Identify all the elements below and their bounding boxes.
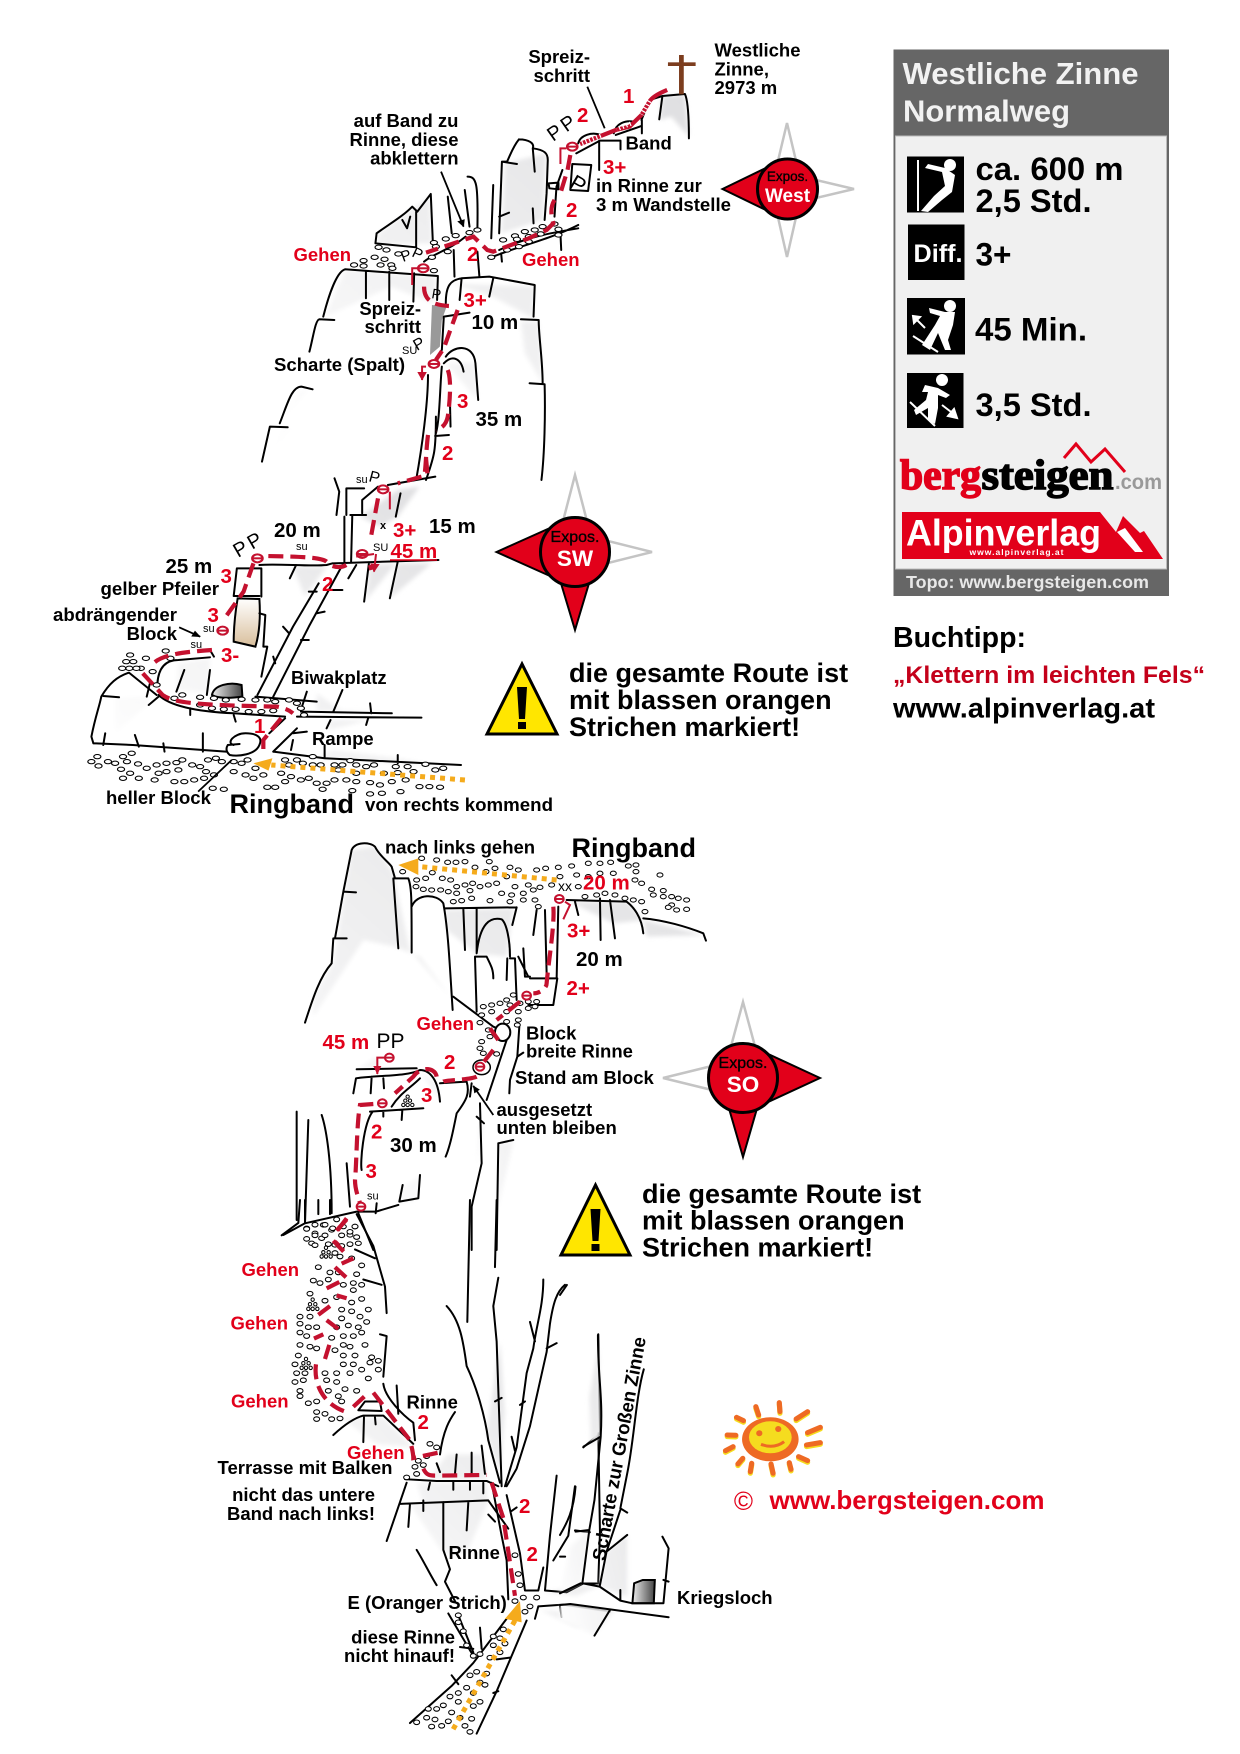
stat: ascent time: 45 Min. (975, 312, 1087, 348)
label: xx: xx (558, 878, 572, 894)
bolt marks middle: SU (373, 542, 388, 554)
terrace lines (283, 1068, 513, 1250)
label: auf Band zu Rinne (350, 110, 458, 168)
heading: Ringband upper: Ringband (230, 789, 354, 819)
icon: climber (907, 156, 964, 212)
grades top: 2 (442, 442, 453, 465)
book url: www.alpinverlag.at (892, 692, 1155, 724)
footer: Topo credit: Topo: www.bergsteigen.com (906, 572, 1149, 592)
label: Gehen gully: Gehen (416, 1013, 474, 1034)
grades lower: 2 (418, 1411, 429, 1434)
stat: length and time: 2,5 Std. (976, 183, 1092, 219)
rock shading (343, 1341, 610, 1628)
topo: upper section summit to terrace (262, 55, 696, 480)
panel: route info (894, 50, 1169, 596)
rock lines upper (234, 477, 438, 602)
logo: Alpinverlag: Alpinverlag (906, 512, 1101, 554)
bolt marks top: SU (402, 345, 417, 357)
logo: bergsteigen.com: .com (1115, 471, 1162, 494)
bolt marks top (399, 109, 591, 357)
label: E (Oranger Strich): E (Oranger Strich) (348, 1592, 507, 1613)
route dashes (143, 477, 421, 755)
icon: warning triangle (561, 1185, 630, 1255)
cairn (403, 1097, 412, 1105)
summit rock lines (499, 94, 689, 233)
pebbles: bowl top (307, 1225, 358, 1245)
route dashes (424, 155, 570, 478)
approach arrowhead (398, 858, 418, 875)
compass: Expos. SW: Expos. (551, 529, 599, 546)
label: Rampe: Rampe (312, 728, 374, 749)
route hatching (581, 101, 649, 144)
grades top: 3 (457, 390, 468, 413)
label: in Rinne zur 3 m Wandstelle: 3 m Wandstelle (596, 194, 731, 215)
topo: middle section down to Ringband (91, 452, 465, 794)
long chimney lines (257, 565, 342, 697)
pointer arrows (179, 627, 232, 792)
grades lower: 3+ (567, 920, 590, 942)
panel body (896, 136, 1166, 569)
labels: Gehen scree (230, 1259, 299, 1412)
grades top (442, 85, 634, 465)
left block and ledge lines (375, 177, 578, 277)
left tower lines (305, 843, 547, 1023)
book tip (892, 622, 1205, 724)
grades top: 2 (566, 199, 577, 222)
label: 45 m PP: PP (376, 1030, 405, 1053)
bolt marks middle: su (203, 623, 215, 635)
grades middle (208, 519, 416, 738)
compass: Expos. West: West (765, 186, 811, 207)
bowl lines (282, 1200, 455, 1472)
label: Scharte zur Großen Zinne: Scharte zur Großen Zinne (589, 1335, 651, 1562)
compass: Expos. SO: SO (727, 1072, 759, 1097)
label: Westliche Zinne summit (714, 40, 801, 98)
pebbles: terrace (407, 1444, 537, 1612)
label: Block breite Rinne: breite Rinne (526, 1040, 633, 1062)
panel title: Westliche Zinne (902, 57, 1138, 91)
rock lines (560, 1285, 669, 1636)
heading: Buchtipp: Buchtipp: (893, 622, 1026, 654)
pebbles: gully (480, 995, 537, 1054)
compass: Expos. SO: Expos. (719, 1055, 767, 1072)
icon: difficulty (908, 224, 964, 280)
label: nicht das untere Band nach links (227, 1484, 375, 1524)
label: 35 m: 35 m (476, 408, 522, 431)
rock shading (115, 487, 435, 765)
label: 45 m PP (322, 1030, 405, 1054)
pebbles: scree bowl (295, 1219, 378, 1419)
route upper end (425, 452, 427, 473)
bolt marks top: P (566, 170, 591, 199)
bolt marks middle: PP (230, 527, 269, 562)
label: in Rinne zur 3 m Wandstelle (596, 175, 731, 215)
logo: bergsteigen.com: steigen (982, 453, 1114, 499)
belay stations (361, 899, 559, 1207)
panel frame (894, 50, 1169, 596)
grades top: 3+ (603, 156, 626, 179)
labels: Gehen scree: Gehen (230, 1312, 288, 1334)
label: Block breite Rinne (526, 1022, 633, 1062)
cairn (122, 655, 136, 668)
label: Biwakplatz: Biwakplatz (291, 667, 387, 688)
label: Stand am Block: Stand am Block (515, 1067, 654, 1088)
label: Gehen right: Gehen (522, 249, 580, 270)
compass: Expos. SO (663, 1002, 820, 1157)
pebbles: ledge (141, 651, 304, 715)
grades lower (366, 920, 590, 1566)
label: Spreizschritt top: Spreiz- (528, 46, 590, 67)
label: 25 m: 25 m (166, 555, 212, 578)
stat: length and time (976, 151, 1124, 219)
label: Rinne lower: Rinne (448, 1542, 500, 1563)
icon: warning triangle (487, 664, 557, 734)
grades middle: 3 (220, 565, 232, 588)
topo: lower section bottom (282, 1200, 610, 1734)
rappel arrows (377, 902, 570, 1074)
block (495, 1024, 510, 1041)
label: Spreizschritt middle (359, 298, 421, 337)
box and right wall lines (453, 898, 706, 1100)
approach dotted line (452, 1621, 515, 1732)
label: nicht das untere Band nach links: nicht das untere (232, 1484, 375, 1505)
label: diese Rinne nicht hinauf: diese Rinne (351, 1626, 455, 1648)
label: ausgesetzt unten bleiben: ausgesetzt (496, 1099, 592, 1120)
chimney shadow (430, 305, 447, 355)
bolt marks middle: su (296, 541, 308, 553)
rock shading (280, 847, 703, 1223)
grades top: 2 (577, 104, 588, 127)
labels: Gehen scree: Gehen (231, 1390, 289, 1412)
bolt marks middle: su (356, 474, 368, 486)
label: Gehen left: Gehen (294, 244, 351, 265)
right wall lines (535, 1334, 610, 1619)
grades top: 1 (623, 85, 634, 108)
stand block (473, 1060, 490, 1075)
label: Band: Band (626, 132, 672, 154)
label: von rechts kommend: von rechts kommend (365, 794, 553, 815)
warning text: mit blassen orangen (569, 685, 832, 715)
bolt marks top: P (430, 285, 442, 303)
label: Westliche Zinne summit: Zinne, (714, 58, 769, 80)
label: Block breite Rinne: Block (526, 1022, 577, 1044)
copyright line: © (734, 1486, 753, 1516)
logo: bergsteigen.com (900, 444, 1162, 499)
pebbles: lower gully (417, 1615, 505, 1732)
grades middle: 1 (254, 715, 265, 738)
label: ausgesetzt unten bleiben (496, 1099, 617, 1138)
grades lower: 2 (526, 1543, 538, 1566)
logo: Alpinverlag: www.alpinverlag.at (968, 547, 1064, 557)
labels: Gehen scree: Gehen (242, 1259, 299, 1280)
route dashes (335, 907, 554, 1250)
label: Spreizschritt middle: Spreiz- (359, 298, 421, 319)
bolt marks top: P (410, 334, 428, 354)
warning text: mit blassen orangen (642, 1206, 905, 1236)
route dashes (314, 1219, 515, 1596)
label: Westliche Zinne summit: Westliche (714, 40, 801, 60)
rock shading (268, 95, 689, 460)
label: 20 m: 20 m (274, 519, 321, 542)
heading: Ringband lower: Ringband (572, 833, 696, 863)
label: abdrängender Block (53, 604, 178, 644)
warning upper (487, 658, 848, 742)
band lines (387, 1446, 508, 1601)
lower gully lines (410, 1613, 527, 1734)
grades lower: 2 (444, 1051, 455, 1074)
label: ausgesetzt unten bleiben: unten bleiben (496, 1117, 617, 1138)
topo: Kriegsloch and Scharte rock (560, 1285, 669, 1636)
label: in Rinne zur 3 m Wandstelle: in Rinne zur (596, 175, 702, 196)
massif lines (91, 650, 461, 765)
light block (226, 733, 260, 756)
label: auf Band zu Rinne: auf Band zu (354, 110, 458, 131)
label: abdrängender Block: Block (127, 623, 178, 644)
approach arrowhead (505, 1601, 522, 1622)
grades top: 2 (467, 243, 478, 266)
icon: ascent (907, 298, 965, 354)
bolt marks middle: P (367, 468, 382, 488)
logo: bergsteigen.com: berg (900, 453, 981, 499)
label: Spreizschritt middle: schritt (364, 316, 421, 337)
grades middle: 3 (208, 604, 219, 627)
cross: summit (668, 55, 696, 94)
pointer arrow (473, 1086, 493, 1115)
book title: „Klettern im leichten Fels“ (893, 662, 1205, 689)
bolt marks middle (190, 468, 388, 651)
stat: descent time: 3,5 Std. (976, 387, 1092, 423)
label: Terrasse mit Balken: Terrasse mit Balken (218, 1457, 392, 1478)
label: 15 m and 45 m: 15 m (429, 515, 476, 538)
label: 15 m and 45 m: 45 m (390, 540, 437, 563)
label: 30 m: 30 m (390, 1134, 437, 1157)
label: heller Block: heller Block (106, 787, 212, 808)
label: nach links gehen: nach links gehen (385, 836, 535, 858)
label: Spreizschritt top: schritt (533, 65, 590, 86)
label: auf Band zu Rinne: Rinne, diese (350, 129, 458, 150)
logo: Alpinverlag (902, 512, 1163, 559)
stat: difficulty: 3+ (976, 236, 1012, 272)
label: 20 m red: 20 m (583, 872, 630, 894)
dark boulder (212, 684, 242, 698)
approach dotted line (271, 765, 465, 780)
grades lower: 2+ (566, 977, 590, 1000)
icon: difficulty: Diff. (914, 240, 962, 268)
warning text: die gesamte Route ist (642, 1179, 921, 1209)
compass: Expos. SW (496, 475, 652, 630)
label: auf Band zu Rinne: abklettern (370, 148, 458, 168)
grades middle: 3- (221, 644, 239, 667)
label: 45 m PP: 45 m (322, 1031, 369, 1054)
bolt marks top: P (409, 244, 426, 264)
compass: Expos. SW: SW (557, 546, 594, 571)
bolt marks top: P (399, 246, 414, 266)
panel title (902, 57, 1138, 128)
grades middle: 3+ (393, 519, 416, 542)
belay stations (423, 147, 572, 364)
compass: Expos. West: Expos. (767, 169, 808, 184)
approach arrowhead (253, 758, 272, 771)
panel title: Normalweg (903, 94, 1070, 128)
grades lower: 2 (371, 1120, 382, 1144)
label: su: su (367, 1190, 379, 1202)
label: 10 m: 10 m (472, 311, 518, 334)
warning text (642, 1179, 921, 1262)
main gully lines (447, 1200, 565, 1599)
label: Spreizschritt top (528, 46, 590, 86)
bolt marks middle: su (190, 639, 202, 651)
label: Rinne upper: Rinne (406, 1392, 458, 1412)
label: Gehen terrace: Gehen (347, 1442, 405, 1463)
label: Kriegsloch: Kriegsloch (677, 1587, 773, 1608)
label: nicht das untere Band nach links: Band nach links! (227, 1503, 375, 1524)
grades middle: 2 (322, 573, 333, 596)
label: gelber Pfeiler: gelber Pfeiler (100, 578, 219, 599)
rappel arrows (356, 492, 390, 572)
rock shading (560, 1347, 627, 1635)
pebbles on ledge (354, 224, 558, 271)
rappel arrows (412, 148, 566, 380)
bolt marks middle: x (380, 520, 387, 532)
label: diese Rinne nicht hinauf (344, 1626, 455, 1666)
pebbles: Ringband (91, 753, 443, 794)
compass: Expos. West (722, 123, 854, 257)
wall lines (262, 269, 545, 480)
bolt marks top: PP (543, 109, 583, 146)
Kriegsloch cave (632, 1580, 655, 1603)
yellow pillar (234, 598, 260, 647)
label: Westliche Zinne summit: 2973 m (714, 77, 777, 98)
grades lower: 2 (519, 1495, 530, 1518)
warning text (569, 658, 848, 742)
label: 15 m and 45 m (390, 515, 476, 563)
icon: descent (907, 373, 964, 428)
route line: summit to scharte (580, 90, 667, 144)
warning text: die gesamte Route ist (569, 658, 848, 688)
label: 20 m: 20 m (576, 948, 623, 971)
warning text: Strichen markiert! (642, 1232, 873, 1262)
grades lower: 3 (421, 1084, 432, 1107)
belay stations (223, 489, 383, 631)
label: Scharte (Spalt): Scharte (Spalt) (274, 354, 405, 375)
pebbles: Ringband (403, 858, 687, 912)
grades top: 3+ (464, 289, 487, 312)
pebbles: cairns (302, 1248, 331, 1368)
warning text: Strichen markiert! (569, 712, 800, 742)
icon: sun (726, 1403, 820, 1475)
approach dotted line (420, 867, 557, 880)
stat: length and time: ca. 600 m (976, 151, 1124, 187)
label: diese Rinne nicht hinauf: nicht hinauf! (344, 1645, 455, 1666)
grades lower: 3 (366, 1160, 377, 1183)
pointer arrows (441, 87, 605, 227)
warning lower (561, 1179, 921, 1262)
copyright line: www.bergsteigen.com (768, 1485, 1044, 1515)
label: abdrängender Block: abdrängender (53, 604, 177, 625)
topo: lower section top (280, 843, 706, 1250)
